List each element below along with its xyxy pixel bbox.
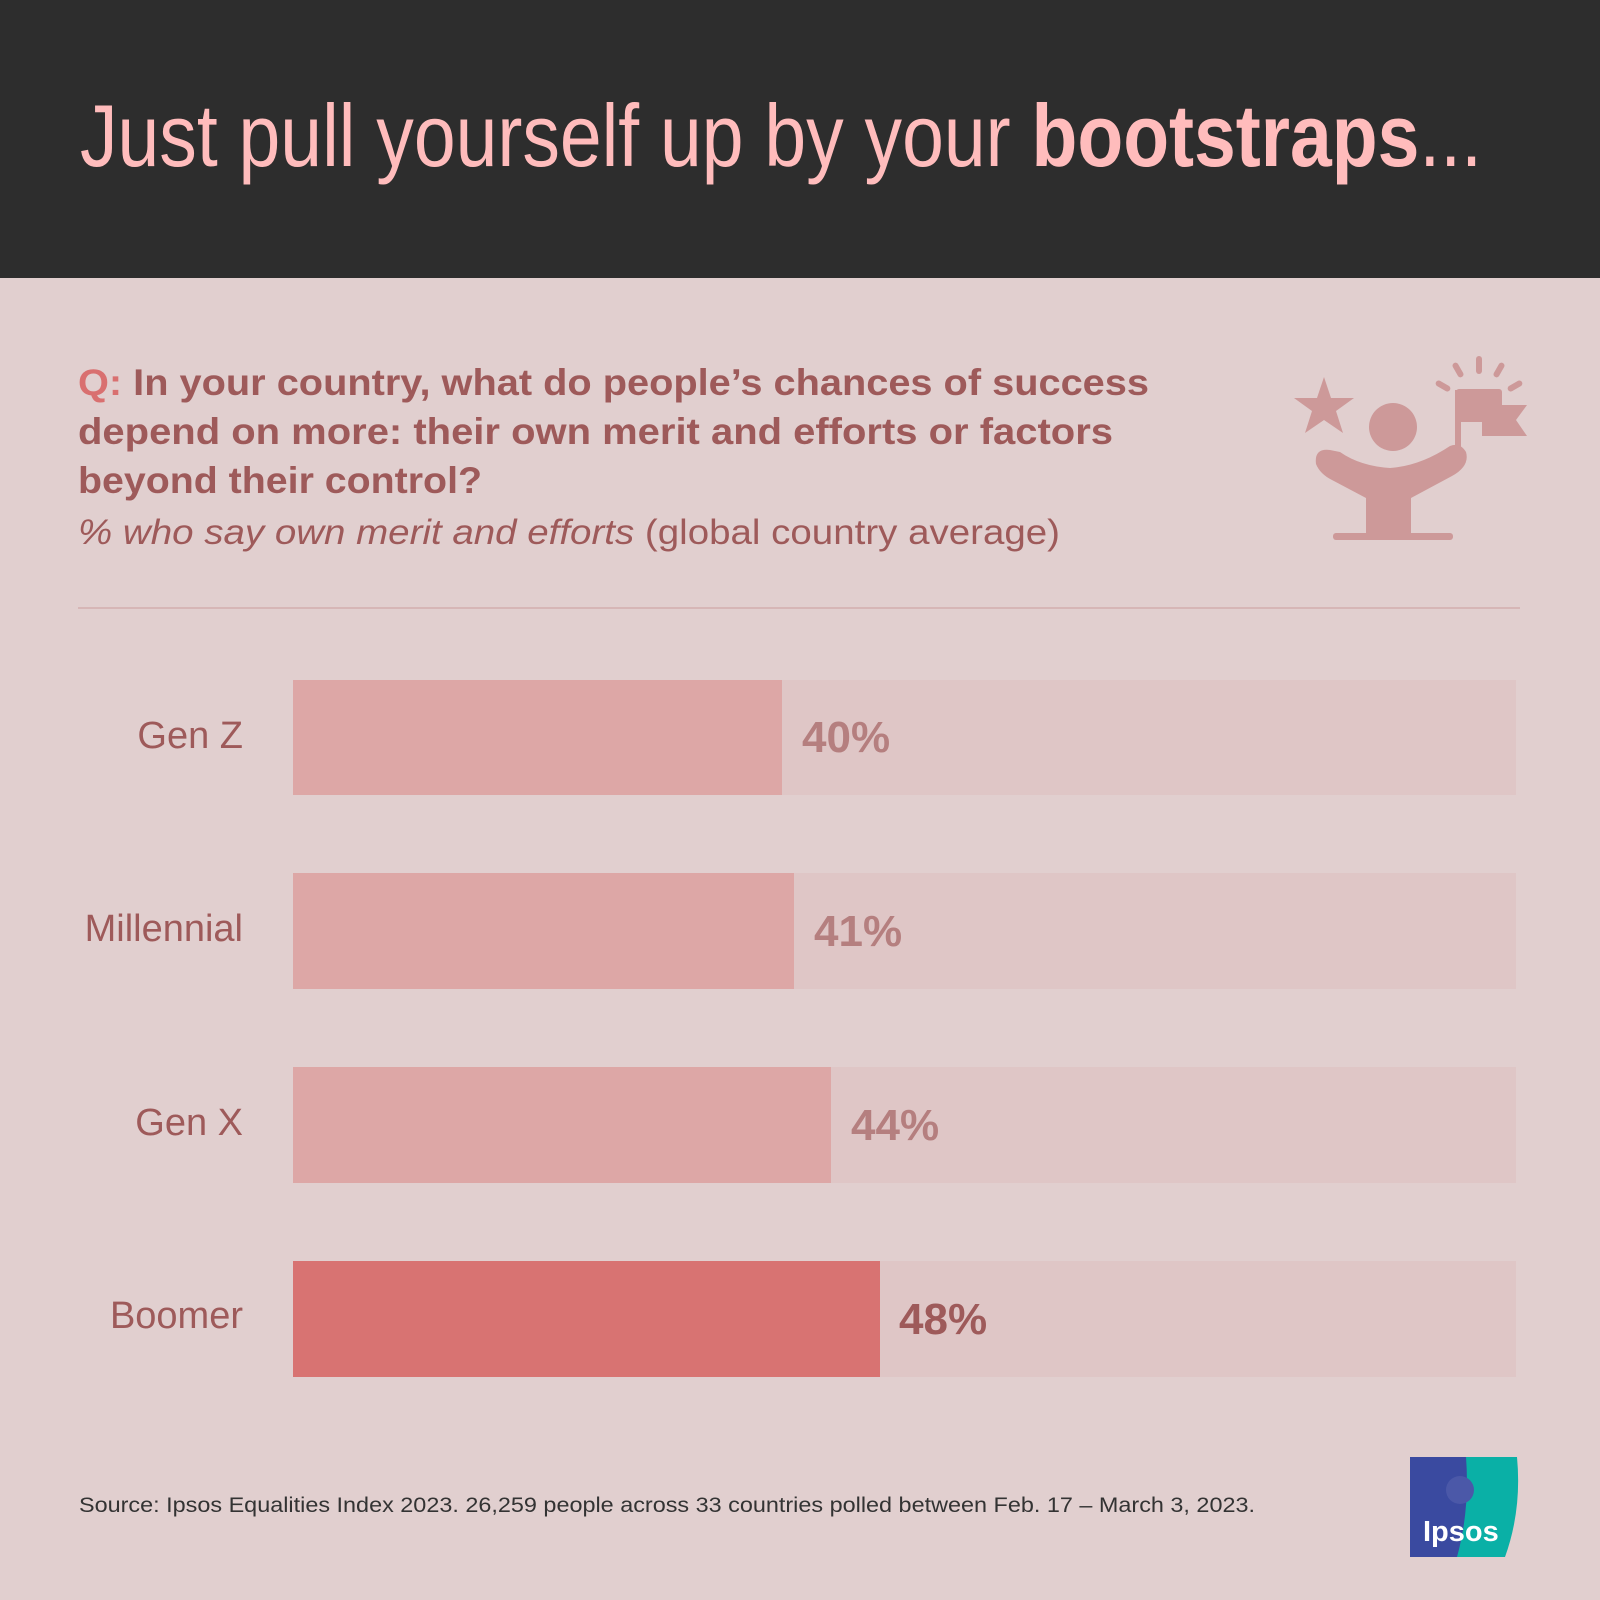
bar: Gen Z xyxy=(137,680,1516,795)
bar: Millennial xyxy=(85,873,1516,989)
logo: Ipsos xyxy=(1410,1457,1518,1557)
bar: Millennial: Millennial xyxy=(85,908,243,950)
bar: Gen Z: Gen Z xyxy=(137,715,243,757)
bar: Boomer xyxy=(110,1261,1516,1377)
bar: Gen X: Gen X xyxy=(135,1102,243,1144)
bar: Gen X: 44% xyxy=(851,1101,939,1150)
bar: Gen Z: 40% xyxy=(802,713,890,762)
logo: Ipsos: Ipsos xyxy=(1423,1516,1499,1548)
bar: Gen X xyxy=(135,1067,1516,1183)
bar: Boomer: 48% xyxy=(899,1295,987,1344)
bar chart xyxy=(85,680,1516,1377)
source note: Source: Ipsos Equalities Index 2023. 26,259 people across 33 countries polled between Feb. 17 – March 3, 2023. xyxy=(79,1493,1255,1517)
question text block: beyond their control? xyxy=(78,460,482,501)
title: Just pull yourself up by your bootstraps... xyxy=(80,86,1482,185)
icon: person with star and flag xyxy=(1294,356,1527,540)
bar: Boomer: Boomer xyxy=(110,1295,243,1337)
header banner xyxy=(0,0,1600,278)
question text block: Q: In your country, what do people’s chances of success xyxy=(78,362,1149,403)
bar: Millennial: 41% xyxy=(814,907,902,956)
question text block: depend on more: their own merit and efforts or factors xyxy=(78,411,1113,452)
question text block xyxy=(78,362,1149,501)
subtitle: % who say own merit and efforts (global country average) xyxy=(78,513,1060,552)
